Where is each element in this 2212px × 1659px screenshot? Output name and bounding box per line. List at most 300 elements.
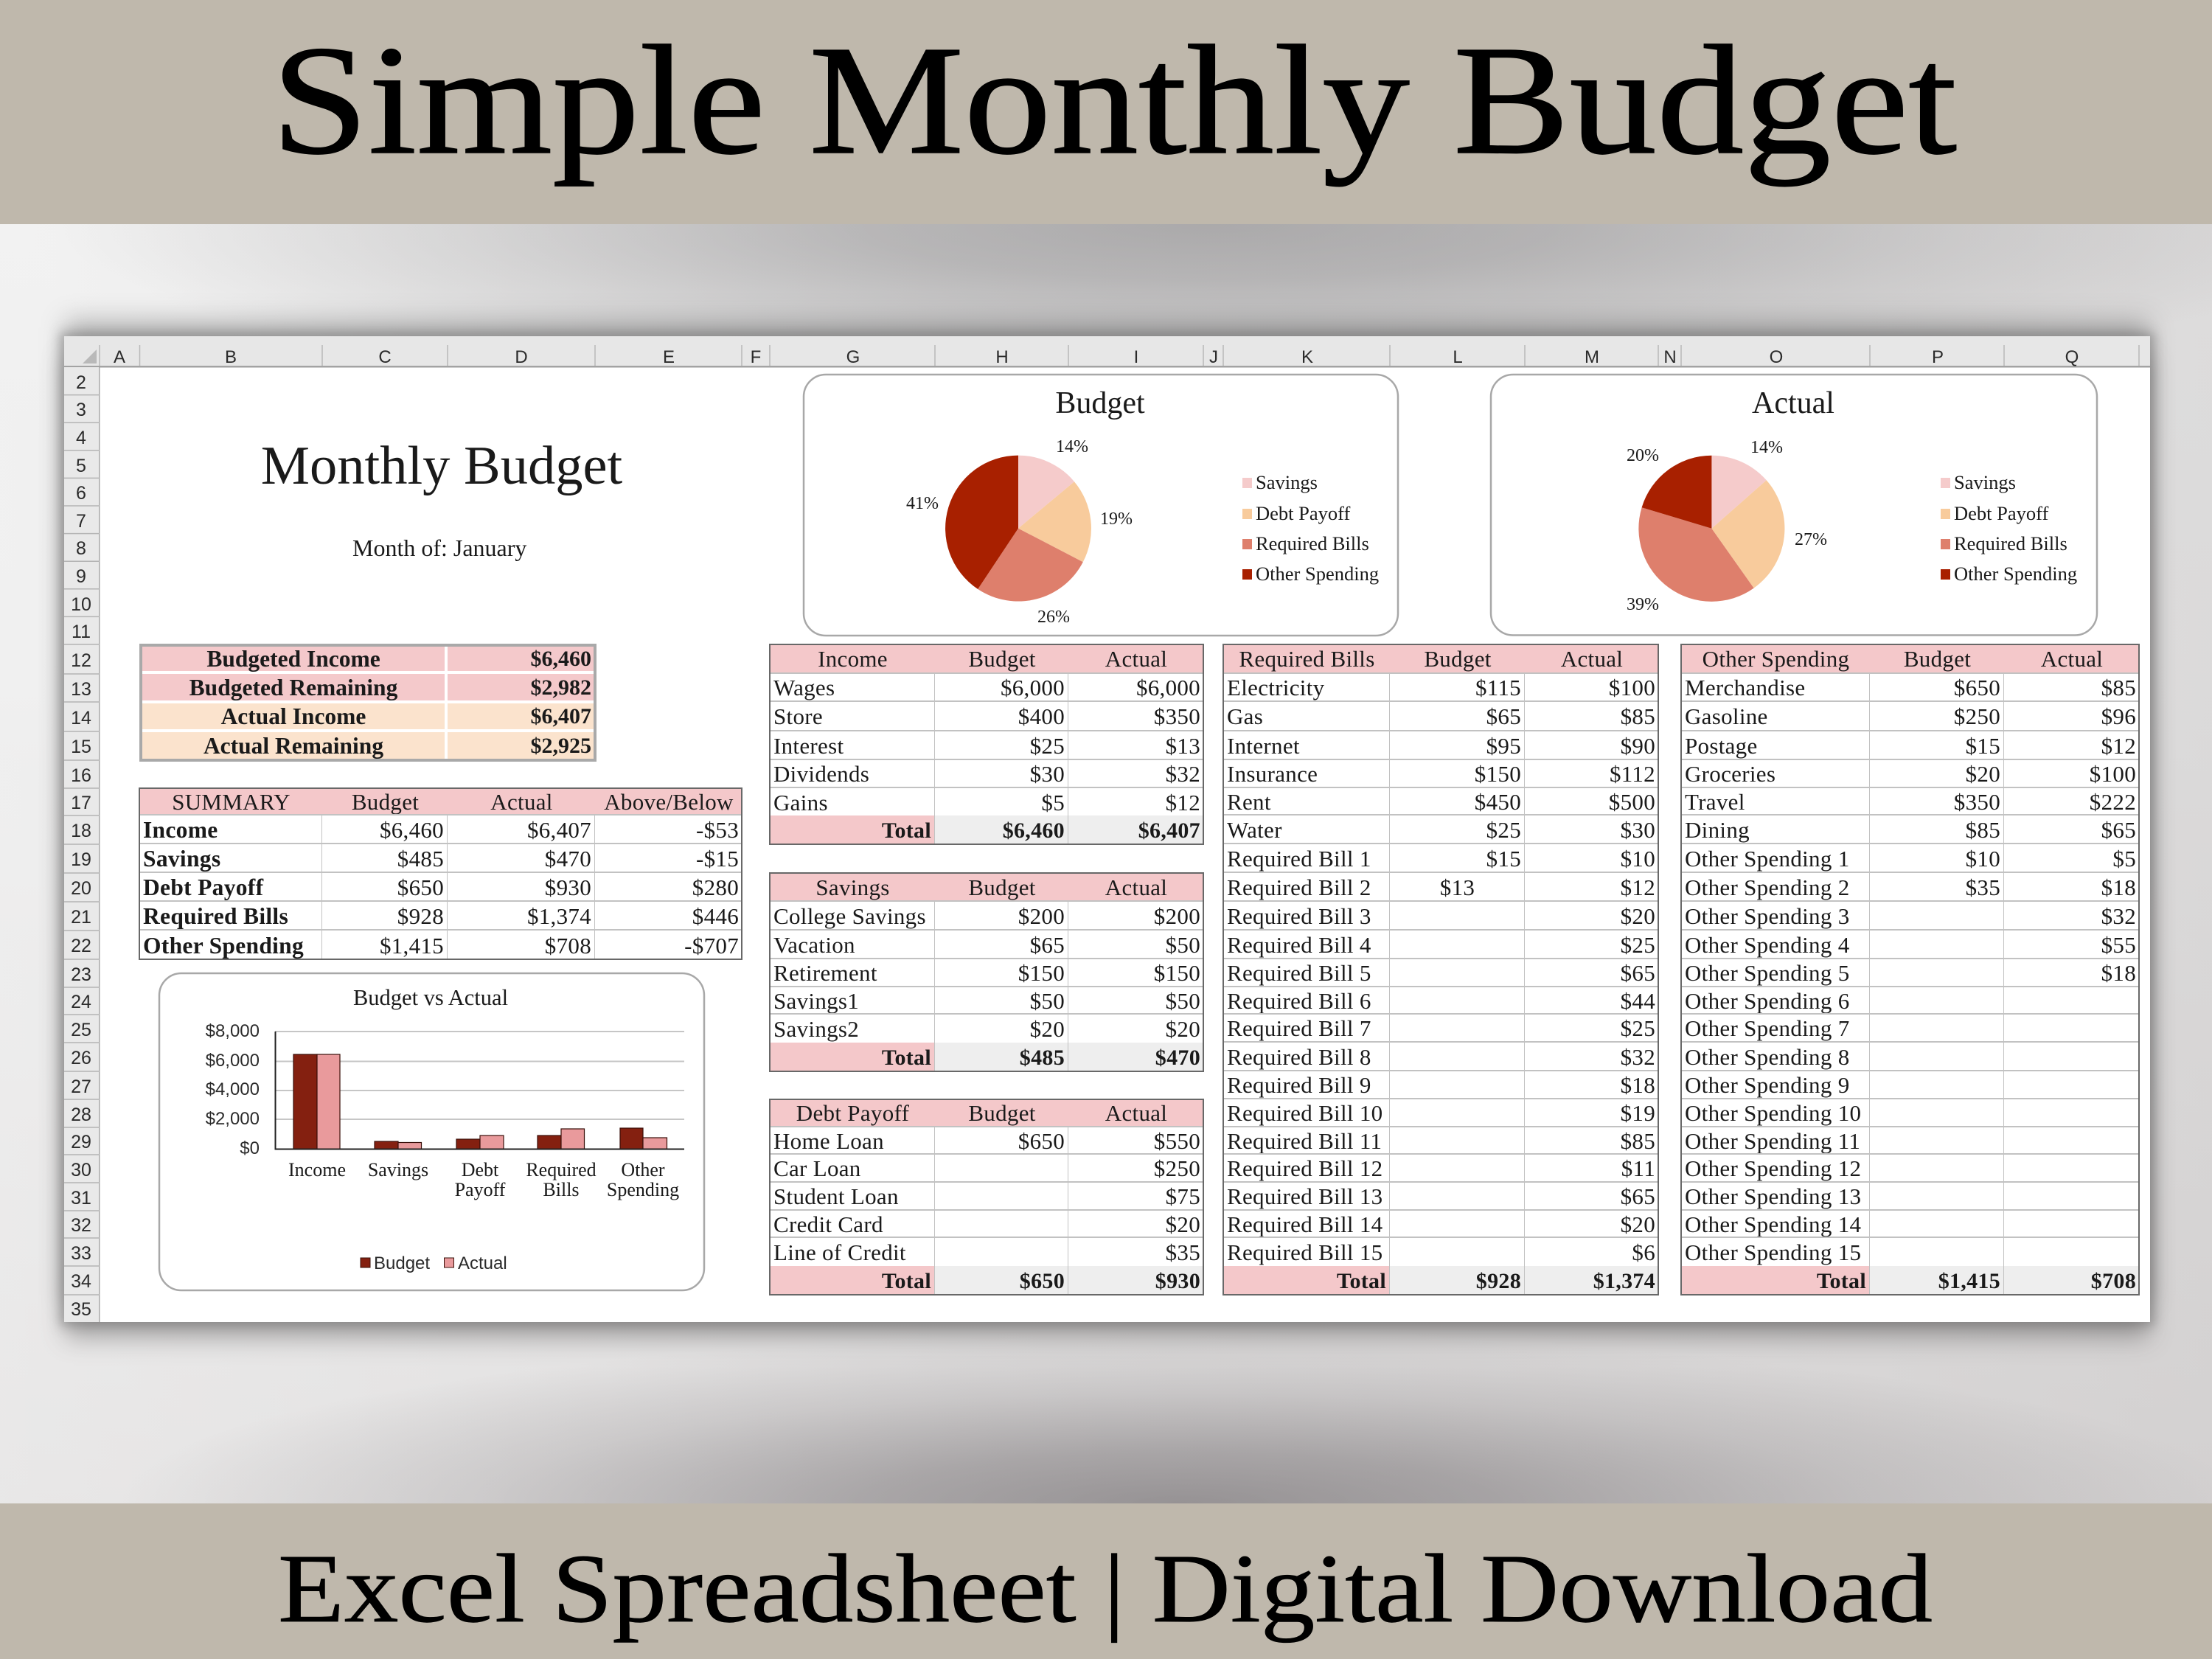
y axis labels: $6,000 (206, 1051, 260, 1071)
pie percent labels: 14% (1056, 437, 1088, 456)
required bills rows: Insurance (1227, 761, 1318, 787)
row header strip: 30 (71, 1160, 91, 1180)
other spending header: Budget (1904, 646, 1971, 672)
row header strip: 11 (72, 622, 91, 642)
other spending rows: $15 (1966, 733, 2000, 758)
required bills rows: $65 (1621, 960, 1655, 986)
other spending rows: Other Spending 8 (1685, 1044, 1849, 1069)
other spending rows: $85 (2101, 675, 2136, 700)
required bills rows: Required Bill 14 (1227, 1211, 1382, 1237)
column header strip: J (1209, 347, 1218, 367)
summary rows: $280 (692, 874, 739, 900)
required bills total: Total (1337, 1268, 1386, 1293)
category labels: Debt (462, 1159, 499, 1180)
chart: budget pie (802, 373, 1399, 637)
column header strip: H (995, 347, 1009, 367)
income header: Actual (1105, 646, 1167, 672)
pie percent labels: 14% (1750, 438, 1783, 457)
savings rows: Retirement (773, 960, 877, 986)
income total: $6,407 (1138, 818, 1200, 842)
debt payoff total: Total (882, 1268, 931, 1293)
y axis labels: $8,000 (206, 1021, 260, 1041)
bottom subtitle banner (0, 1503, 2212, 1659)
debt payoff total: $650 (1020, 1268, 1065, 1293)
income rows: $6,000 (1136, 675, 1200, 700)
row header strip: 21 (71, 907, 91, 928)
other spending rows: Other Spending 9 (1685, 1072, 1849, 1098)
other spending rows: $650 (1954, 675, 2000, 700)
pie legend: Other Spending (1954, 563, 2077, 585)
required bills rows: Required Bill 5 (1227, 960, 1371, 986)
other spending rows: Postage (1685, 733, 1758, 758)
row header strip: 35 (71, 1299, 91, 1320)
chart title: Budget vs Actual (353, 985, 508, 1010)
savings rows: Vacation (773, 932, 855, 957)
required bills rows: Required Bill 7 (1227, 1015, 1371, 1041)
bars (293, 1054, 667, 1149)
other spending total (1682, 1266, 2138, 1294)
required bills rows: $12 (1621, 874, 1655, 900)
savings rows: $20 (1166, 1016, 1200, 1042)
pie legend: Savings (1256, 471, 1318, 493)
pie percent labels: 20% (1627, 446, 1659, 465)
row header strip: 9 (76, 566, 86, 587)
savings total: $470 (1155, 1046, 1200, 1069)
other spending rows: Other Spending 10 (1685, 1100, 1861, 1126)
savings header: Savings (815, 874, 890, 900)
other spending rows: Gasoline (1685, 703, 1768, 729)
summary rows: $708 (545, 932, 591, 959)
other spending rows: $96 (2101, 703, 2136, 729)
summary rows: -$15 (696, 845, 739, 872)
summary rows: $930 (545, 874, 591, 900)
other spending rows: Merchandise (1685, 675, 1805, 700)
savings rows: $65 (1030, 932, 1065, 957)
row header strip: 7 (76, 511, 86, 532)
debt payoff rows: $550 (1154, 1128, 1200, 1153)
row header strip: 22 (71, 936, 91, 956)
savings rows: $150 (1018, 960, 1065, 986)
pie slices (1638, 456, 1784, 602)
required bills rows: Required Bill 15 (1227, 1239, 1382, 1265)
row header strip: 32 (71, 1215, 91, 1236)
other spending rows: Other Spending 4 (1685, 932, 1849, 957)
column header strip: I (1134, 347, 1138, 367)
pie title: Budget (1055, 386, 1145, 420)
budgeted remaining: $2,982 (531, 675, 591, 699)
income header (770, 644, 1203, 674)
other spending rows (1682, 674, 2138, 1266)
savings total: Total (882, 1046, 931, 1069)
other spending rows: $5 (2112, 845, 2136, 872)
summary rows: $470 (545, 845, 591, 872)
row header strip: 29 (71, 1132, 91, 1152)
income rows: $6,000 (1001, 675, 1065, 700)
income rows: $5 (1041, 789, 1065, 815)
actual remaining: Actual Remaining (204, 733, 383, 758)
other spending rows: $100 (2090, 761, 2136, 787)
row header strip: 17 (71, 793, 91, 813)
category labels: Other (621, 1159, 665, 1180)
summary rows: -$707 (684, 932, 739, 959)
column header strip (64, 336, 2150, 367)
row header strip: 12 (71, 650, 91, 671)
other spending rows: $12 (2101, 733, 2136, 758)
row header strip: 8 (76, 538, 86, 559)
debt payoff rows: $250 (1154, 1155, 1200, 1181)
other spending rows: Other Spending 14 (1685, 1211, 1861, 1237)
required bills rows: Required Bill 4 (1227, 932, 1371, 957)
budgeted income: $6,460 (531, 647, 591, 671)
debt payoff rows: Credit Card (773, 1211, 883, 1237)
other spending rows: Other Spending 5 (1685, 960, 1849, 986)
savings rows: $20 (1030, 1016, 1065, 1042)
required bills rows: $15 (1486, 845, 1521, 872)
required bills header: Required Bills (1239, 646, 1375, 672)
required bills rows: Required Bill 1 (1227, 845, 1371, 872)
pie legend: Debt Payoff (1954, 502, 2048, 524)
budgeted income (142, 647, 594, 674)
summary rows: $446 (692, 902, 739, 929)
required bills rows: $100 (1609, 675, 1655, 700)
y axis labels: $0 (240, 1138, 260, 1158)
row header strip: 28 (71, 1105, 91, 1125)
savings rows: $50 (1166, 932, 1200, 957)
column header strip: F (751, 347, 761, 367)
pie percent labels (1627, 438, 1827, 614)
pie slices (945, 456, 1091, 602)
required bills rows: $18 (1621, 1072, 1655, 1098)
summary rows: -$53 (696, 817, 739, 842)
pie percent labels: 39% (1627, 595, 1659, 614)
required bills rows: Electricity (1227, 675, 1324, 700)
pie percent labels: 26% (1037, 608, 1070, 627)
debt payoff rows (771, 1127, 1203, 1266)
savings rows: $200 (1018, 902, 1065, 929)
summary header (139, 788, 742, 815)
summary table (139, 788, 742, 959)
other spending rows: Other Spending 12 (1685, 1155, 1861, 1181)
savings total (771, 1043, 1203, 1071)
required bills table (1223, 644, 1658, 1295)
other spending header: Other Spending (1703, 646, 1849, 672)
column header strip: L (1453, 347, 1463, 367)
column header strip: B (225, 347, 237, 367)
row header strip: 10 (71, 594, 91, 615)
income rows: $400 (1018, 703, 1065, 729)
required bills header: Budget (1424, 646, 1492, 672)
savings rows: Savings2 (773, 1016, 859, 1042)
pie legend: Savings (1954, 471, 2016, 493)
other spending rows: $32 (2101, 902, 2136, 929)
chart legend (361, 1253, 507, 1273)
column header strip: O (1770, 347, 1783, 367)
y axis labels: $2,000 (206, 1109, 260, 1129)
required bills rows: $10 (1621, 845, 1655, 872)
category labels: Payoff (455, 1179, 506, 1200)
row header strip: 20 (71, 878, 91, 899)
income header: Budget (968, 646, 1036, 672)
summary rows: Income (143, 817, 218, 842)
summary rows: $928 (397, 902, 444, 929)
savings rows: $150 (1154, 960, 1200, 986)
row header strip: 24 (71, 992, 91, 1012)
actual income: Actual Income (221, 703, 366, 729)
required bills total: $928 (1476, 1268, 1521, 1293)
column header strip: P (1932, 347, 1944, 367)
pie legend: Debt Payoff (1256, 502, 1350, 524)
summary rows (140, 815, 741, 959)
other spending table (1681, 644, 2139, 1295)
pie legend (1242, 471, 1379, 585)
income table (770, 644, 1203, 844)
debt payoff total (771, 1266, 1203, 1294)
debt payoff table (770, 1099, 1203, 1295)
row header strip: 13 (71, 679, 91, 700)
required bills header: Actual (1561, 646, 1623, 672)
savings table (770, 873, 1203, 1071)
required bills rows: $95 (1486, 733, 1521, 758)
required bills rows: Rent (1227, 789, 1271, 814)
column header strip: K (1301, 347, 1313, 367)
savings rows (771, 902, 1203, 1043)
required bills rows: Required Bill 11 (1227, 1128, 1382, 1153)
required bills rows: $11 (1621, 1155, 1655, 1181)
income rows: $32 (1166, 761, 1200, 787)
debt payoff rows: Home Loan (773, 1128, 884, 1153)
required bills rows: $150 (1475, 761, 1521, 787)
required bills rows: Required Bill 3 (1227, 902, 1371, 929)
summary header: Actual (490, 789, 553, 814)
income rows: $12 (1166, 789, 1200, 815)
summary header: SUMMARY (172, 789, 291, 814)
other spending header (1681, 644, 2139, 674)
budgeted remaining (142, 674, 594, 703)
required bills rows: Water (1227, 817, 1282, 842)
required bills rows: Required Bill 6 (1227, 988, 1371, 1013)
required bills rows: $90 (1621, 733, 1655, 758)
income rows: Store (773, 703, 823, 729)
row header strip: 3 (76, 400, 86, 420)
required bills rows: $20 (1621, 1211, 1655, 1237)
summary rows: $485 (397, 845, 444, 872)
other spending total: Total (1817, 1268, 1866, 1293)
required bills rows: $13 (1440, 874, 1475, 900)
required bills rows: $85 (1621, 1128, 1655, 1153)
other spending total: $1,415 (1938, 1268, 2000, 1293)
category labels: Savings (368, 1159, 428, 1180)
row header strip: 6 (76, 483, 86, 504)
required bills rows: Internet (1227, 733, 1300, 758)
summary rows: $650 (397, 874, 444, 900)
pie percent labels: 27% (1795, 530, 1827, 549)
pie title: Actual (1752, 386, 1834, 420)
pie legend: Required Bills (1256, 532, 1369, 554)
pie percent labels (906, 437, 1133, 627)
row header strip: 23 (71, 964, 91, 985)
savings header (770, 873, 1203, 902)
other spending rows: Groceries (1685, 761, 1775, 787)
other spending rows: $20 (1966, 761, 2000, 787)
budgeted remaining: Budgeted Remaining (189, 674, 397, 700)
required bills rows: $450 (1475, 789, 1521, 814)
debt payoff rows: Line of Credit (773, 1239, 906, 1265)
other spending rows: Other Spending 2 (1685, 874, 1849, 900)
actual income (142, 703, 594, 732)
y axis labels (206, 1021, 260, 1158)
row header strip: 14 (71, 708, 91, 728)
category labels: Bills (543, 1179, 580, 1200)
required bills rows: $25 (1621, 932, 1655, 957)
chart: budget vs actual bars (158, 972, 705, 1292)
column header strip: M (1585, 347, 1599, 367)
category labels (288, 1159, 679, 1200)
required bills rows: $32 (1621, 1044, 1655, 1069)
required bills total (1224, 1266, 1658, 1294)
y axis labels: $4,000 (206, 1079, 260, 1099)
debt payoff rows: Car Loan (773, 1155, 861, 1181)
pie percent labels: 41% (906, 494, 939, 513)
other spending rows: $85 (1966, 817, 2000, 842)
savings rows: Savings1 (773, 988, 859, 1013)
income total: $6,460 (1003, 818, 1065, 842)
other spending rows: Dining (1685, 817, 1750, 842)
required bills rows: Required Bill 8 (1227, 1044, 1371, 1069)
income rows: Wages (773, 675, 835, 700)
income rows: $30 (1030, 761, 1065, 787)
column header strip: N (1663, 347, 1677, 367)
chart legend: Budget (374, 1253, 430, 1273)
summary rows: $6,407 (527, 817, 591, 842)
other spending rows: Other Spending 7 (1685, 1015, 1849, 1041)
income total: Total (882, 818, 931, 842)
income rows: Interest (773, 733, 844, 758)
savings header: Budget (968, 874, 1036, 900)
pie legend (1941, 471, 2077, 585)
top title banner (0, 0, 2212, 224)
column header strip: G (846, 347, 860, 367)
other spending rows: $18 (2101, 960, 2136, 986)
other spending rows: Travel (1685, 789, 1745, 814)
required bills rows: $115 (1475, 675, 1521, 700)
summary rows: Required Bills (143, 902, 288, 929)
column header strip: D (515, 347, 528, 367)
required bills rows: Required Bill 2 (1227, 874, 1371, 900)
other spending rows: $350 (1954, 789, 2000, 814)
savings rows: $200 (1154, 902, 1200, 929)
required bills rows: $19 (1621, 1100, 1655, 1126)
debt payoff header: Actual (1105, 1100, 1167, 1126)
other spending rows: Other Spending 6 (1685, 988, 1849, 1013)
sheet heading: Monthly Budget: Monthly Budget (261, 436, 622, 496)
spreadsheet window (64, 336, 2150, 1322)
other spending rows: Other Spending 13 (1685, 1183, 1861, 1209)
category labels: Required (526, 1159, 597, 1180)
row header strip: 4 (76, 428, 86, 448)
debt payoff rows: $35 (1166, 1239, 1200, 1265)
bottom subtitle banner: Excel Spreadsheet | Digital Download (278, 1534, 1933, 1643)
required bills rows: Gas (1227, 703, 1263, 729)
income rows: Dividends (773, 761, 869, 787)
debt payoff header: Budget (968, 1100, 1036, 1126)
row header strip: 2 (76, 372, 86, 393)
required bills header (1223, 644, 1658, 674)
summary rows: Savings (143, 845, 220, 872)
row header strip (64, 367, 100, 1322)
required bills rows: $65 (1621, 1183, 1655, 1209)
other spending rows: Other Spending 11 (1685, 1128, 1860, 1153)
chart legend: Actual (458, 1253, 507, 1273)
debt payoff rows: $650 (1018, 1128, 1065, 1153)
summary rows: $1,374 (527, 902, 591, 929)
budget overview block (139, 644, 597, 762)
income rows: $350 (1154, 703, 1200, 729)
row header strip: 26 (71, 1048, 91, 1068)
category labels: Income (288, 1159, 346, 1180)
debt payoff total: $930 (1155, 1268, 1200, 1293)
savings total: $485 (1020, 1046, 1065, 1069)
row header strip: 16 (71, 765, 91, 786)
savings rows: $50 (1030, 988, 1065, 1013)
actual remaining (142, 732, 594, 759)
required bills rows: $30 (1621, 817, 1655, 842)
required bills rows: Required Bill 12 (1227, 1155, 1382, 1181)
debt payoff header: Debt Payoff (796, 1100, 909, 1126)
required bills total: $1,374 (1593, 1268, 1655, 1293)
column header strip: A (114, 347, 125, 367)
other spending rows: $55 (2101, 932, 2136, 957)
income total (771, 815, 1203, 844)
row header strip: 34 (71, 1271, 91, 1292)
required bills rows: Required Bill 10 (1227, 1100, 1382, 1126)
row header strip: 27 (71, 1077, 91, 1097)
spreadsheet column and row headers (64, 336, 2150, 1322)
required bills rows (1224, 674, 1658, 1266)
debt payoff header (770, 1099, 1203, 1127)
required bills rows: Required Bill 9 (1227, 1072, 1371, 1098)
other spending rows: $222 (2090, 789, 2136, 814)
budgeted income: Budgeted Income (206, 646, 380, 672)
row header strip: 5 (76, 456, 86, 476)
other spending rows: $65 (2101, 817, 2136, 842)
required bills rows: $65 (1486, 703, 1521, 729)
top title banner: Simple Monthly Budget (271, 13, 1957, 187)
category labels: Spending (607, 1179, 679, 1200)
required bills rows: $112 (1610, 761, 1655, 787)
required bills rows: $25 (1621, 1015, 1655, 1041)
actual remaining: $2,925 (531, 733, 591, 758)
other spending rows: Other Spending 3 (1685, 902, 1849, 929)
other spending rows: $35 (1966, 874, 2000, 900)
summary header: Above/Below (604, 789, 734, 814)
savings rows: College Savings (773, 902, 926, 929)
chart: actual pie (1489, 373, 2098, 636)
pie legend: Required Bills (1954, 532, 2067, 554)
required bills rows: $6 (1632, 1239, 1655, 1265)
summary rows: $6,460 (380, 817, 444, 842)
debt payoff rows: Student Loan (773, 1183, 899, 1209)
pie percent labels: 19% (1100, 509, 1133, 529)
required bills rows: $25 (1486, 817, 1521, 842)
income rows: $25 (1030, 733, 1065, 758)
required bills rows: $85 (1621, 703, 1655, 729)
income rows: Gains (773, 789, 828, 815)
row header strip: 25 (71, 1020, 91, 1040)
required bills rows: $20 (1621, 902, 1655, 929)
summary rows: $1,415 (380, 932, 444, 959)
summary rows: Other Spending (143, 932, 304, 959)
row header strip: 15 (71, 737, 91, 757)
